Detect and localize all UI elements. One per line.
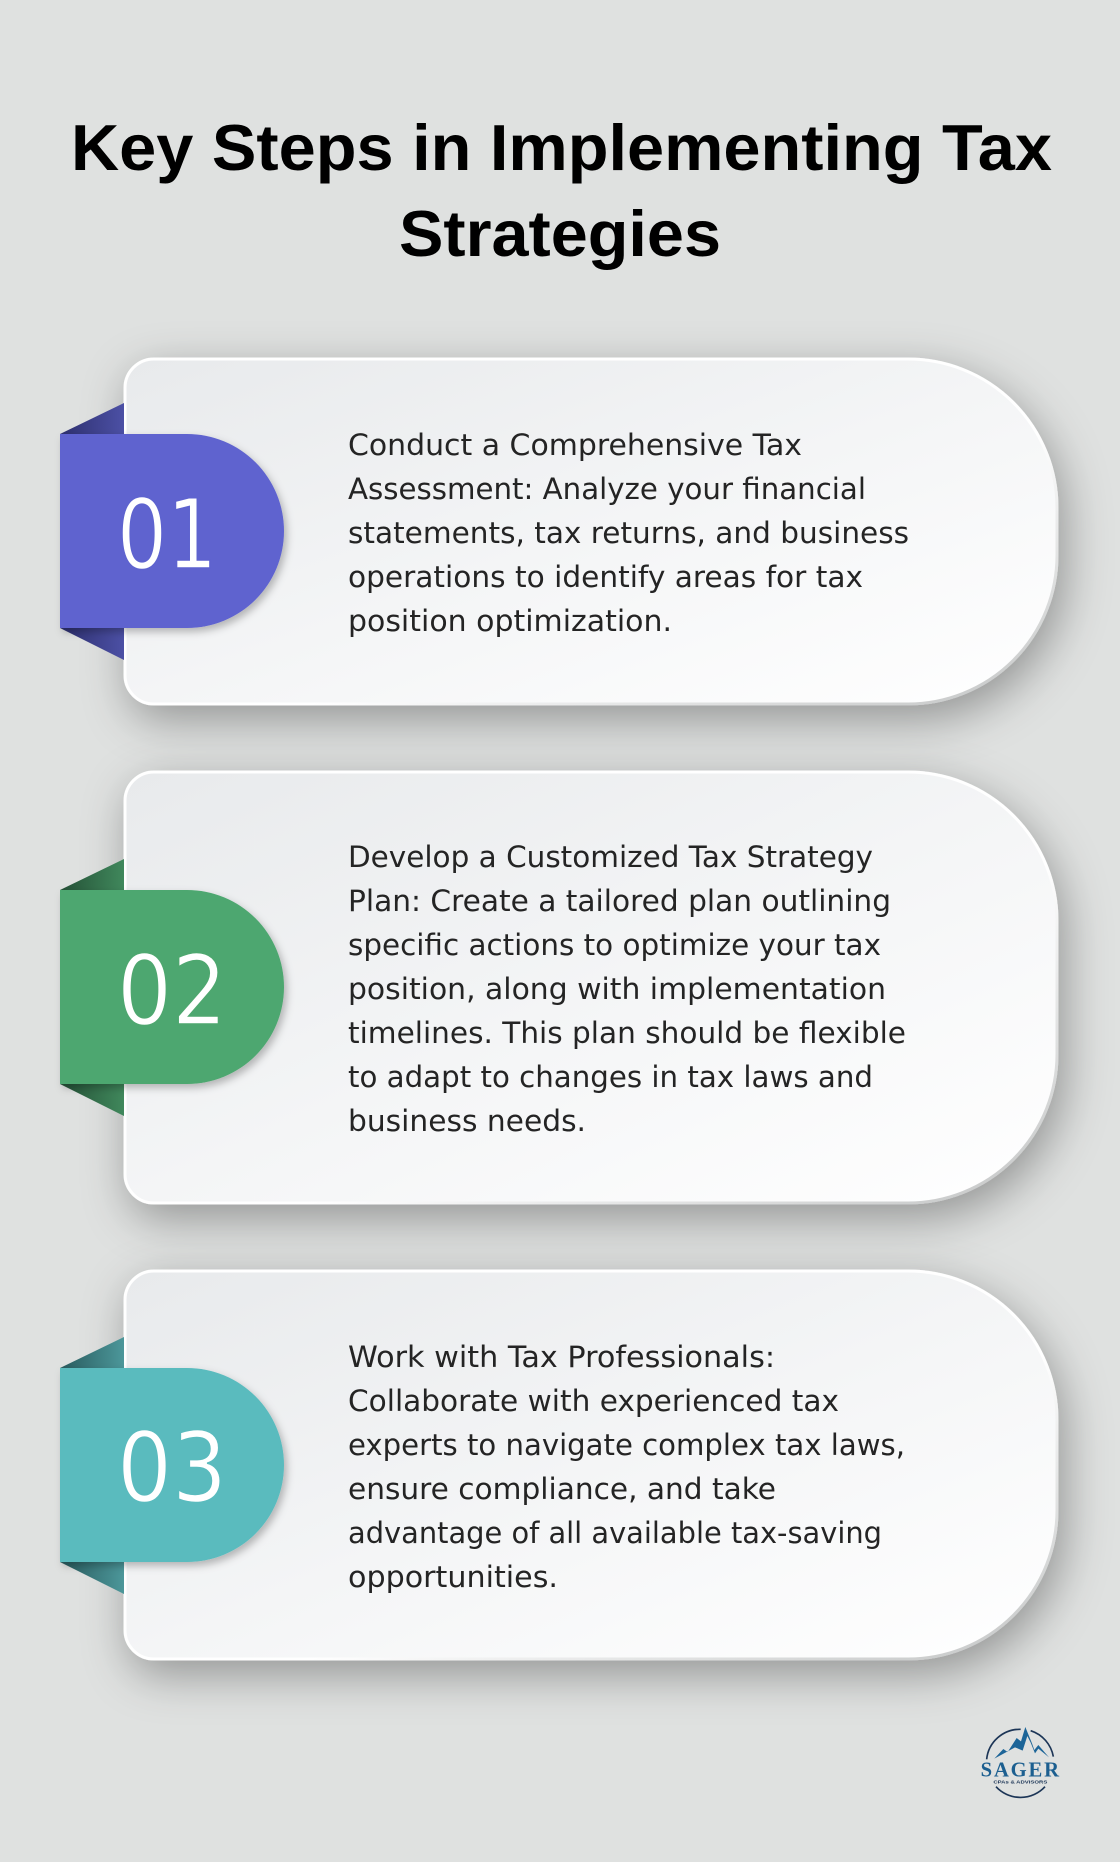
number 03: 03 (117, 1412, 227, 1524)
step 3 text: advantage of all available tax-saving (348, 1516, 882, 1550)
logo wordmark: SAGER (981, 1760, 1060, 1782)
step 2 text (348, 840, 906, 1138)
step 1 text: statements, tax returns, and business (348, 516, 909, 550)
step 1 text: operations to identify areas for tax (348, 560, 863, 594)
logo: Sager CPAs & Advisors (981, 1727, 1060, 1797)
step 3 text: opportunities. (348, 1560, 558, 1594)
panel: step 3 (60, 1271, 1057, 1659)
step 2 text: Develop a Customized Tax Strategy (348, 840, 873, 874)
step 1 text: position optimization. (348, 604, 672, 638)
ribbon fold bottom 3 (60, 1562, 124, 1594)
title: Key Steps in Implementing Tax (71, 111, 1052, 184)
step 3 text (348, 1340, 905, 1594)
ribbon fold top 3 (60, 1337, 124, 1368)
number 02: 02 (117, 935, 227, 1047)
ribbon fold top 2 (60, 859, 124, 890)
step 3 text: experts to navigate complex tax laws, (348, 1428, 905, 1462)
step 2 text: timelines. This plan should be flexible (348, 1016, 906, 1050)
logo tagline: CPAs & ADVISORS (993, 1779, 1047, 1784)
title: Strategies (399, 197, 721, 270)
step 2 text: Plan: Create a tailored plan outlining (348, 884, 891, 918)
number badge 1 (60, 434, 284, 628)
ribbon fold bottom 1 (60, 628, 124, 660)
number badge 3 (60, 1368, 284, 1562)
title (71, 111, 1052, 270)
step 3 text: Work with Tax Professionals: (348, 1340, 775, 1374)
step 2 text: position, along with implementation (348, 972, 886, 1006)
step 3 text: Collaborate with experienced tax (348, 1384, 839, 1418)
logo ring (987, 1729, 1053, 1797)
logo mountains (994, 1727, 1049, 1759)
step 1 text (348, 428, 909, 638)
step 1 text: Conduct a Comprehensive Tax (348, 428, 802, 462)
step 2 text: specific actions to optimize your tax (348, 928, 881, 962)
card 2 (125, 772, 1057, 1203)
step 2 text: business needs. (348, 1104, 586, 1138)
ribbon fold top 1 (60, 403, 124, 434)
panel: step 1 (60, 359, 1057, 704)
step 2 text: to adapt to changes in tax laws and (348, 1060, 873, 1094)
panel: step 2 (60, 772, 1057, 1203)
number badge 2 (60, 890, 284, 1084)
card 3 (125, 1271, 1057, 1659)
number 01: 01 (117, 479, 217, 591)
card 1 (125, 359, 1057, 704)
ribbon fold bottom 2 (60, 1084, 124, 1116)
step 3 text: ensure compliance, and take (348, 1472, 776, 1506)
step 1 text: Assessment: Analyze your financial (348, 472, 866, 506)
